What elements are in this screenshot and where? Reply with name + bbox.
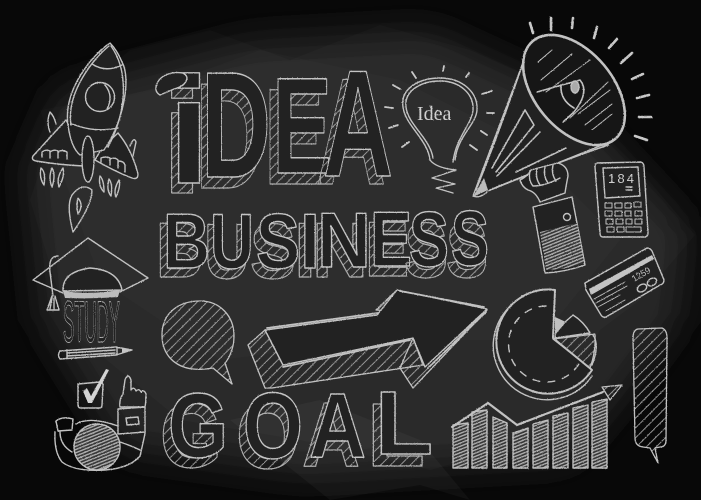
heading: BUSINESS: S <box>256 197 300 285</box>
cap tassel <box>47 296 59 310</box>
heading: iDEA: A <box>323 39 393 209</box>
icon: person seen from above <box>55 418 145 470</box>
heading: iDEA: i <box>161 56 203 226</box>
megaphone mouth <box>503 16 645 164</box>
heading: GOAL: G <box>168 375 228 477</box>
icon: checkbox <box>78 369 109 408</box>
icon: credit card <box>585 248 664 317</box>
calculator display: 184 <box>608 171 634 186</box>
heading: GOAL <box>160 373 433 488</box>
heading: BUSINESS <box>156 194 489 295</box>
megaphone cone <box>473 52 612 197</box>
calculator keys <box>605 202 642 232</box>
bulb rays <box>385 66 494 150</box>
heading: GOAL: O <box>236 383 300 488</box>
heading: BUSINESS: E <box>370 195 412 283</box>
heading: BUSINESS: S <box>404 206 448 294</box>
pie hatched slice <box>553 334 595 368</box>
heading: iDEA: A <box>316 47 386 217</box>
pie top slice <box>555 315 590 338</box>
heading: BUSINESS: S <box>250 207 296 295</box>
heading: GOAL: A <box>309 375 366 477</box>
icon: rocket <box>32 43 138 232</box>
icon: graduation cap <box>33 238 148 310</box>
icon: pencil <box>58 347 132 359</box>
heading: iDEA <box>156 39 393 226</box>
heading: GOAL: L <box>375 374 433 474</box>
heading: iDEA: E <box>272 50 332 203</box>
rocket window <box>86 82 114 112</box>
text: STUDY <box>63 290 120 355</box>
heading: GOAL: O <box>243 373 303 478</box>
icon: calculator <box>595 162 648 237</box>
icon: pointing hand <box>118 376 146 434</box>
heading: iDEA: D <box>201 40 271 209</box>
heading: BUSINESS: U <box>210 197 254 285</box>
megaphone sound rays <box>530 18 651 140</box>
icon: megaphone with hand <box>473 16 651 273</box>
letter i dot <box>156 73 187 95</box>
heading: BUSINESS: I <box>294 206 316 294</box>
heading: BUSINESS: N <box>317 196 371 284</box>
fist <box>520 163 568 202</box>
trend arrowhead <box>602 385 622 400</box>
pie main sector <box>496 290 592 394</box>
heading: iDEA: i <box>168 46 210 216</box>
heading: BUSINESS: U <box>204 207 250 295</box>
icon: light bulb <box>385 66 494 193</box>
icon: tall speech bubble <box>633 328 667 463</box>
heading: BUSINESS: S <box>451 194 489 282</box>
heading: iDEA: D <box>195 51 265 220</box>
heading: GOAL: A <box>302 384 360 486</box>
heading: GOAL: G <box>160 385 222 487</box>
chart: rising bars <box>452 385 622 468</box>
rocket flames <box>40 168 120 197</box>
chart: pie <box>493 289 596 400</box>
trend line <box>452 392 603 427</box>
rocket nozzle <box>82 136 94 182</box>
heading: BUSINESS: S <box>409 195 449 283</box>
bulb label: Idea <box>417 103 452 125</box>
heading: BUSINESS: S <box>446 206 488 294</box>
icon: round speech bubble <box>162 301 234 384</box>
heading: BUSINESS: I <box>300 197 320 285</box>
heading: iDEA: E <box>264 61 324 214</box>
heading: GOAL: L <box>367 386 425 486</box>
hand sleeve <box>533 197 585 273</box>
card number: 1259 <box>630 265 652 284</box>
heading: BUSINESS: B <box>163 197 210 285</box>
arrow <box>248 290 487 388</box>
heading: BUSINESS: E <box>365 205 409 293</box>
heading: BUSINESS: N <box>312 206 368 294</box>
heading: BUSINESS: B <box>156 206 203 294</box>
